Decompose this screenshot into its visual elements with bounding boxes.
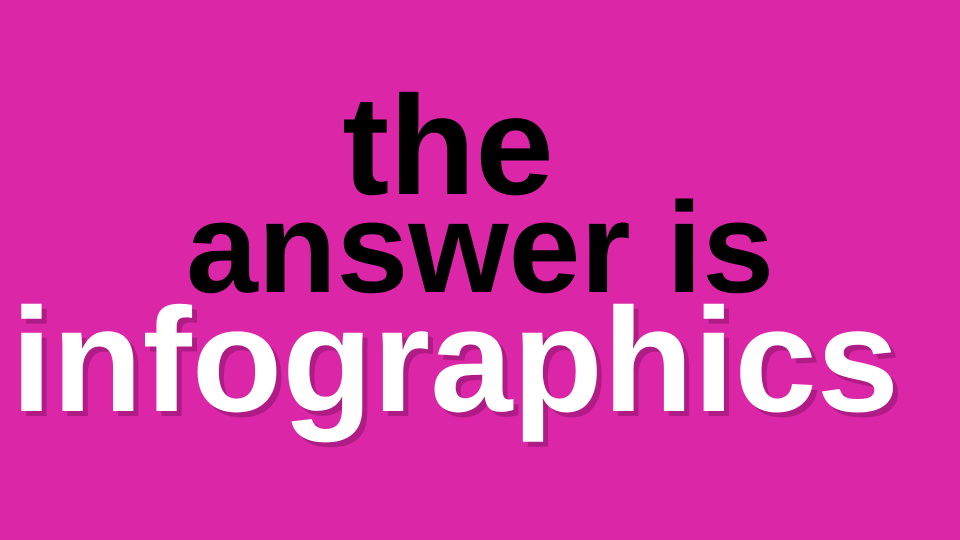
heading: the: the [342,66,554,224]
heading: answer is: answer is [186,176,774,320]
heading: infographics: infographics [11,278,899,443]
